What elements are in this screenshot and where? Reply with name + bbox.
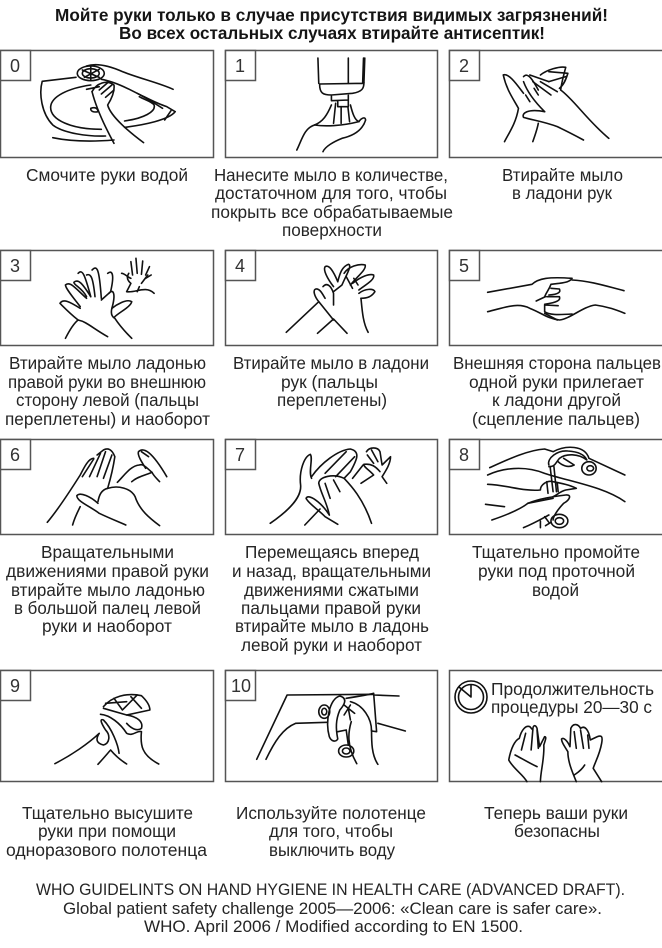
panel: step 4 palm to palm interlaced	[226, 250, 438, 410]
caption 11: безопасны	[514, 821, 600, 841]
caption 9	[6, 803, 207, 860]
panel: step 8 rinse	[450, 440, 662, 600]
caption 10: для того, чтобы	[269, 821, 393, 841]
frame 10	[226, 670, 438, 782]
caption 4: переплетены)	[277, 390, 387, 410]
frame 6	[0, 440, 214, 534]
caption 1: достаточном для того, чтобы	[215, 183, 447, 203]
frame 1	[226, 50, 438, 158]
panel: step 0 wet hands	[0, 50, 214, 185]
step number 5: 5	[459, 256, 469, 276]
duration text: Продолжительность	[491, 679, 654, 699]
caption 7: левой руки и наоборот	[241, 635, 422, 655]
caption 7: пальцами правой руки	[241, 598, 421, 618]
caption 11	[484, 803, 628, 841]
illustration: fingertips circling in palm	[270, 448, 391, 525]
illustration: rotational thumb rubbing	[47, 449, 167, 526]
caption 2: Втирайте мыло	[502, 165, 623, 185]
panel: step 6 rub thumbs	[0, 440, 214, 636]
frame 9	[0, 670, 214, 782]
caption 7: втирайте мыло в ладонь	[235, 616, 429, 636]
title	[55, 5, 608, 43]
caption 1: поверхности	[282, 220, 382, 240]
caption 1: покрыть все обрабатываемые	[211, 202, 453, 222]
step number 2	[450, 50, 480, 80]
frame 0	[0, 50, 214, 158]
panel: step 5 interlocked fingers	[450, 250, 662, 429]
step number 8	[450, 440, 480, 470]
panel: step 2 rub palms	[450, 50, 662, 203]
caption 4: рук (пальцы	[281, 372, 378, 392]
caption 3	[5, 353, 210, 429]
panel: step 10 turn off tap with towel	[226, 670, 438, 860]
illustration: fingers interlaced over back of hand	[60, 258, 154, 338]
panel: step 9 dry	[0, 670, 214, 860]
caption 3: сторону левой (пальцы	[16, 390, 199, 410]
caption 9: одноразового полотенца	[6, 840, 207, 860]
panel: step 1 apply soap	[211, 50, 453, 240]
frame 4	[226, 250, 438, 346]
frame 2	[450, 50, 662, 158]
step number 6: 6	[10, 445, 20, 465]
caption 7	[232, 542, 431, 655]
title: Мойте руки только в случае присутствия видимых загрязнений!	[55, 5, 608, 25]
caption 4	[233, 353, 429, 410]
caption 6: Вращательными	[41, 542, 174, 562]
frame 3	[0, 250, 214, 346]
caption 3: правой руки во внешнюю	[8, 372, 206, 392]
step number 9: 9	[10, 676, 20, 696]
step number 9	[0, 670, 30, 700]
step number 0: 0	[10, 56, 20, 76]
caption 10: выключить воду	[269, 840, 395, 860]
caption 4: Втирайте мыло в ладони	[233, 353, 429, 373]
step number 6	[0, 440, 30, 470]
caption 7: и назад, вращательными	[232, 561, 431, 581]
caption 7: Перемещаясь вперед	[245, 542, 419, 562]
caption 7: движениями сжатыми	[244, 580, 419, 600]
illustration: drying hands with towel	[55, 695, 159, 764]
frame 7	[226, 440, 438, 534]
illustration: interlaced fingers	[286, 264, 375, 333]
caption 0: Смочите руки водой	[26, 165, 188, 185]
caption 9: руки при помощи	[38, 821, 176, 841]
duration text: процедуры 20—30 с	[491, 697, 652, 717]
caption 10	[236, 803, 426, 860]
frame 5	[450, 250, 662, 346]
step number 1: 1	[235, 56, 245, 76]
caption 9: Тщательно высушите	[22, 803, 193, 823]
step number 0	[0, 50, 30, 80]
footer source text	[36, 880, 625, 936]
illustration: palm to palm	[503, 67, 609, 142]
caption 6: руки и наоборот	[42, 616, 172, 636]
caption 3: переплетены) и наоборот	[5, 409, 210, 429]
caption 6: в большой палец левой	[14, 598, 201, 618]
illustration: backs of fingers in palm	[488, 278, 625, 320]
illustration: tap and towel	[257, 693, 405, 764]
step number 3	[0, 250, 30, 280]
caption 6: втирайте мыло ладонью	[11, 580, 205, 600]
illustration: rinse under running water	[486, 447, 625, 528]
panel: step 3 back of hand	[0, 250, 214, 429]
illustration: hands at sink	[41, 65, 175, 143]
caption 5: (сцепление пальцев)	[472, 409, 640, 429]
step number 5	[450, 250, 480, 280]
step number 10: 10	[231, 676, 251, 696]
step number 1	[226, 50, 256, 80]
caption 3: Втирайте мыло ладонью	[9, 353, 206, 373]
footer source text: WHO. April 2006 / Modified according to EN 1500.	[144, 917, 523, 936]
illustration: clean open hands	[509, 725, 602, 782]
caption 10: Используйте полотенце	[236, 803, 426, 823]
step number 4: 4	[235, 256, 245, 276]
footer source text: Global patient safety challenge 2005—2006: «Clean care is safer care».	[63, 899, 602, 918]
duration text	[491, 679, 654, 717]
step number 2: 2	[459, 56, 469, 76]
caption 5	[453, 353, 661, 429]
step number 10	[226, 670, 256, 700]
step number 8: 8	[459, 445, 469, 465]
caption 1: Нанесите мыло в количестве,	[214, 165, 448, 185]
footer source text: WHO GUIDELINTS ON HAND HYGIENE IN HEALTH CARE (ADVANCED DRAFT).	[36, 880, 625, 899]
panel: duration and safe hands	[450, 670, 662, 841]
step number 4	[226, 250, 256, 280]
step number 7: 7	[235, 445, 245, 465]
caption 8: водой	[532, 580, 579, 600]
caption 1	[211, 165, 453, 240]
caption 2	[502, 165, 623, 203]
panel: step 7 rub fingertips in palm	[226, 440, 438, 655]
caption 5: Внешняя сторона пальцев	[453, 353, 661, 373]
caption 8: Тщательно промойте	[472, 542, 640, 562]
icon: clock	[455, 681, 487, 713]
step number 7	[226, 440, 256, 470]
caption 2: в ладони рук	[512, 183, 612, 203]
frame 8	[450, 440, 662, 534]
title: Во всех остальных случаях втирайте антисептик!	[119, 23, 545, 43]
caption 6	[6, 542, 209, 636]
illustration: soap dispenser and hand	[297, 58, 366, 152]
caption 8: руки под проточной	[478, 561, 635, 581]
caption 8	[472, 542, 640, 600]
caption 11: Теперь ваши руки	[484, 803, 628, 823]
step number 3: 3	[10, 256, 20, 276]
caption 5: одной руки прилегает	[469, 372, 644, 392]
caption 6: движениями правой руки	[6, 561, 209, 581]
caption 5: к ладони другой	[492, 390, 621, 410]
frame 11	[450, 670, 662, 782]
